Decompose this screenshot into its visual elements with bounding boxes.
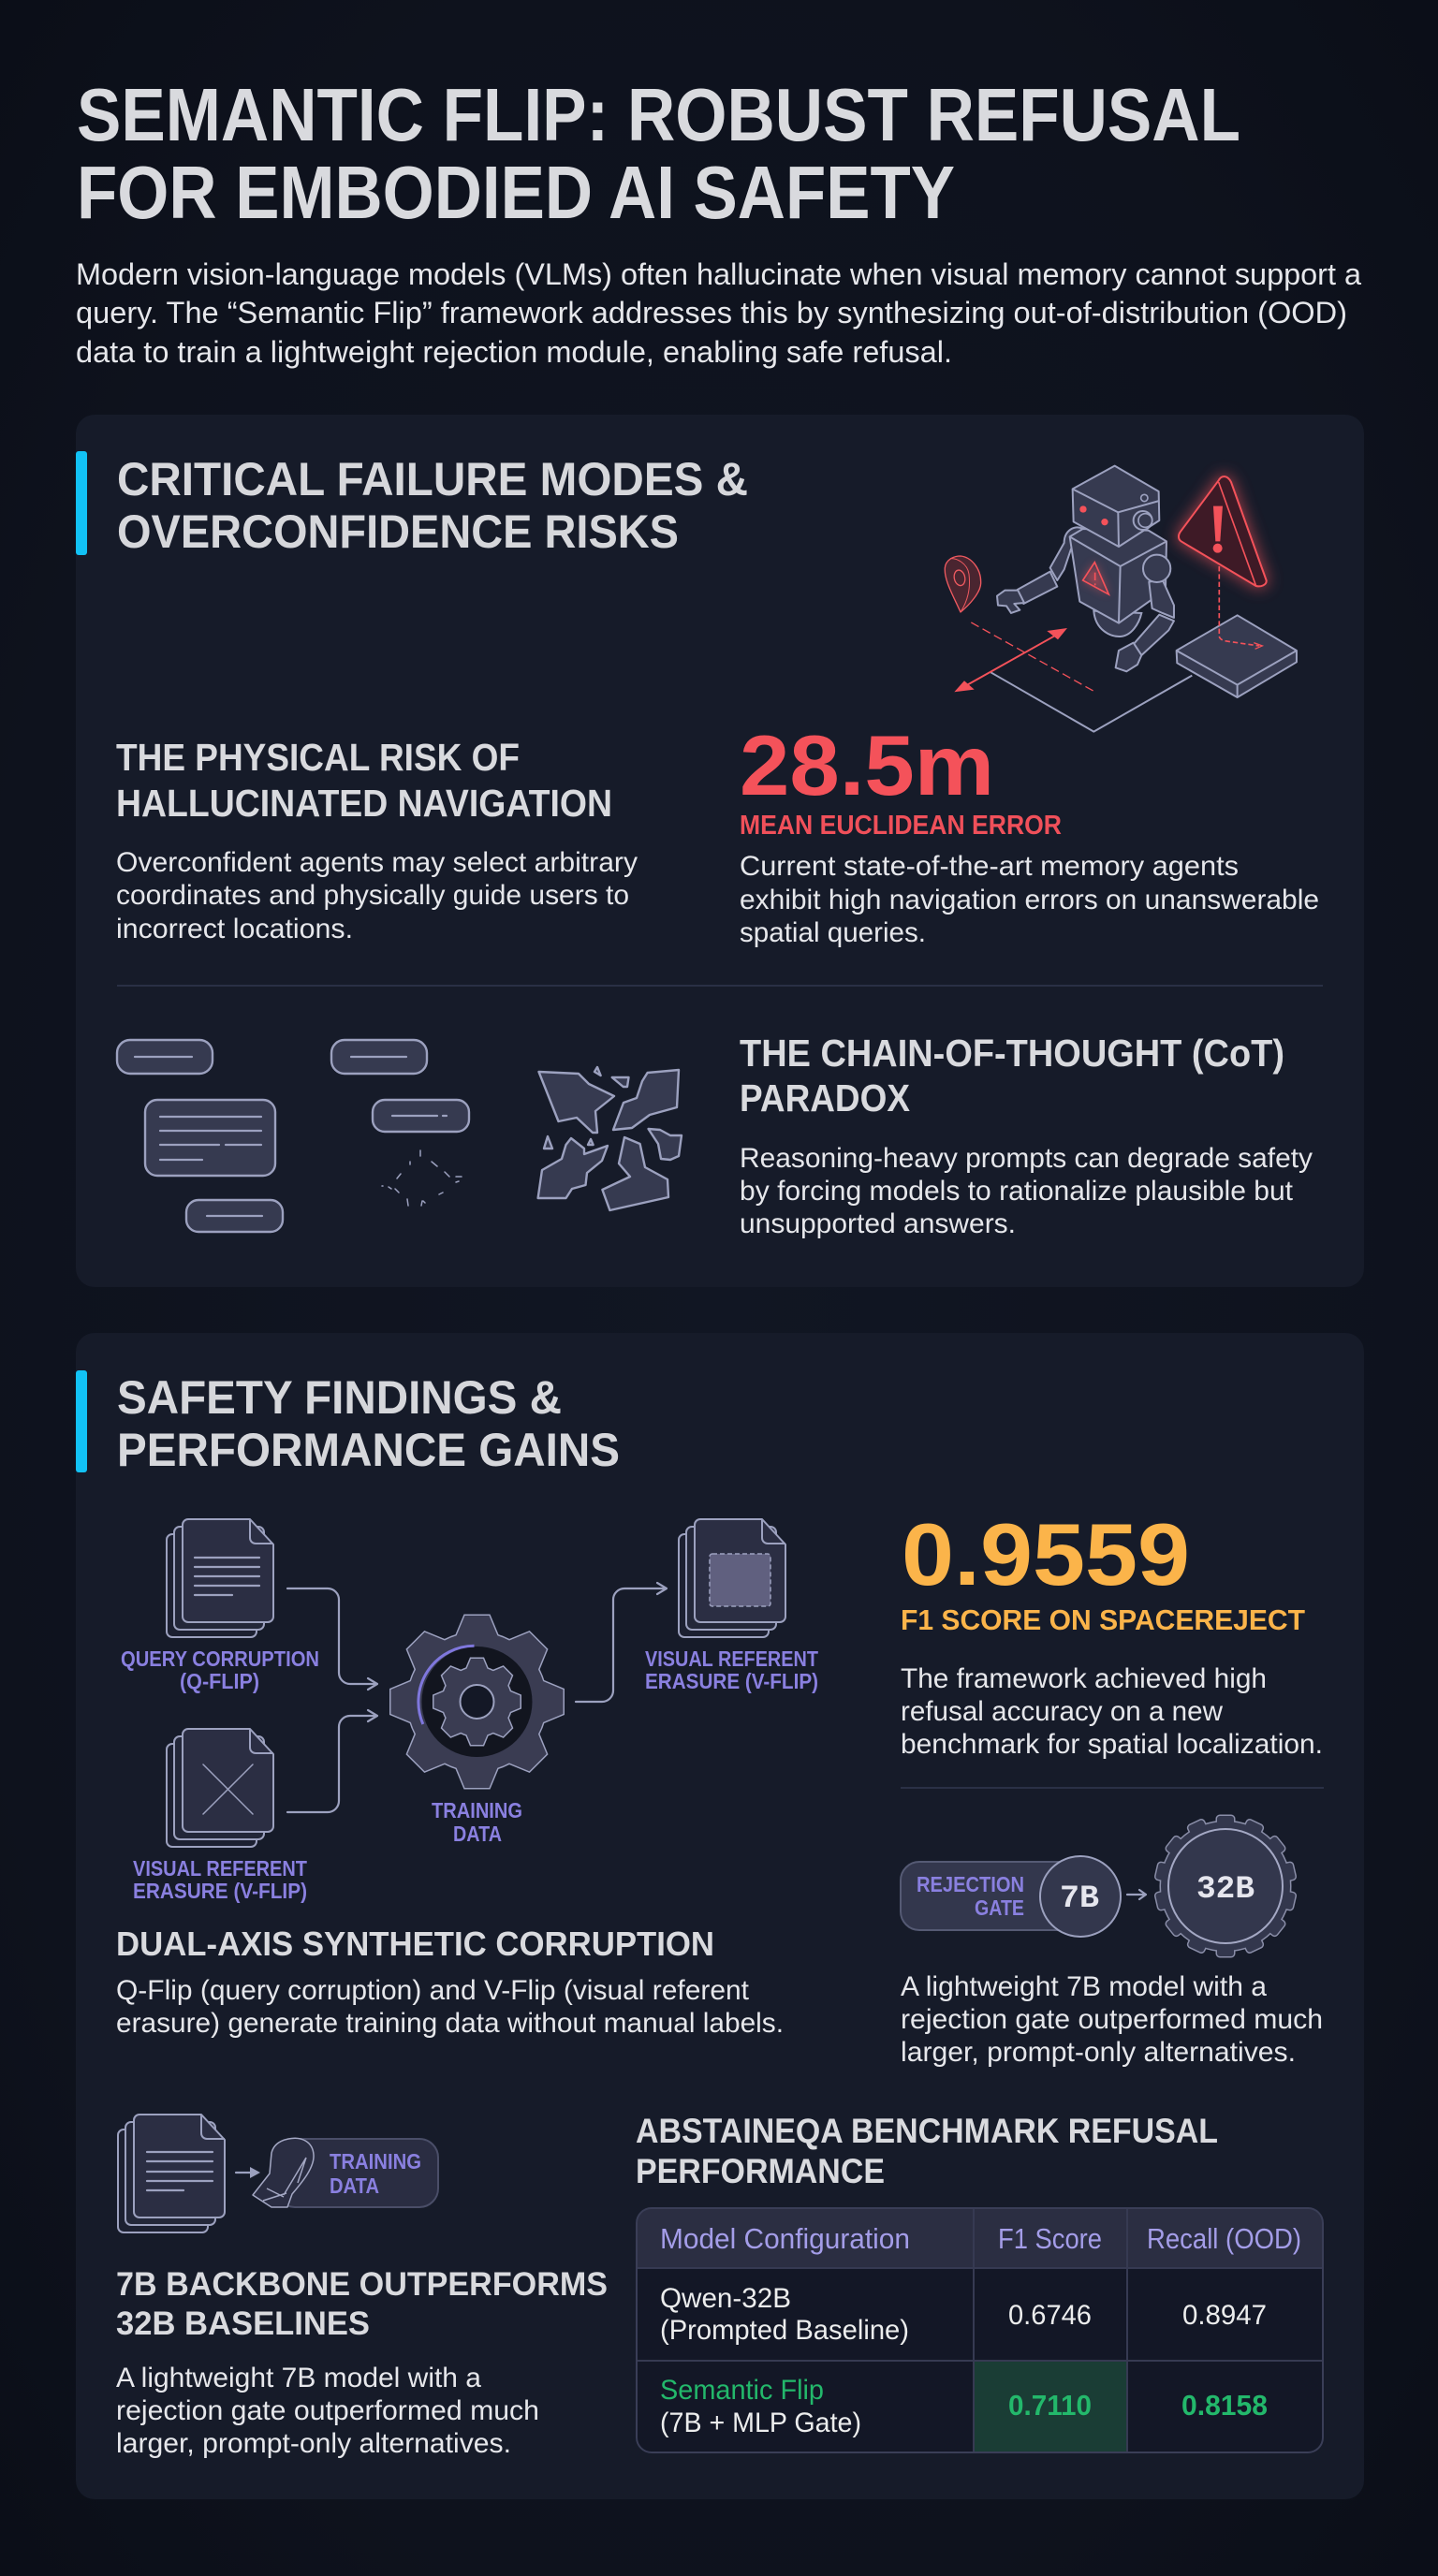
block: lightweight 7B text	[901, 1971, 1323, 2068]
label: visual referent erasure lower: ERASURE (V-FLIP)	[133, 1879, 307, 1903]
stat: 28.5m mean euclidean error: MEAN EUCLIDEAN ERROR	[740, 811, 1062, 841]
stat: 28.5m mean euclidean error: Current state-of-the-art memory agents	[740, 851, 1239, 882]
arrow: erased document to gear	[287, 1710, 377, 1812]
title: FOR EMBODIED AI SAFETY	[77, 151, 955, 234]
table: refusal performance: Semantic Flip	[660, 2375, 824, 2406]
icon: rejection gate 7B versus 32B gear: 7B	[1060, 1881, 1099, 1917]
block: physical risk: THE PHYSICAL RISK OF	[116, 736, 520, 779]
table: refusal performance: Qwen-32B	[660, 2283, 791, 2314]
stat: 0.9559 F1 score: F1 SCORE ON SPACEREJECT	[901, 1603, 1305, 1636]
label: query corruption	[121, 1647, 319, 1693]
block: 7B backbone	[116, 2266, 608, 2459]
table: refusal performance: F1 Score	[998, 2222, 1102, 2255]
intro text block: query. The “Semantic Flip” framework addresses this by synthesizing out-of-distribution (OOD)	[76, 296, 1347, 329]
table heading	[636, 2112, 1218, 2190]
intro text block: Modern vision-language models (VLMs) often hallucinate when visual memory cannot support a	[76, 257, 1361, 291]
section heading: safety findings	[76, 1370, 620, 1476]
block: chain-of-thought paradox: PARADOX	[740, 1076, 910, 1120]
title: SEMANTIC FLIP: ROBUST REFUSAL	[77, 73, 1240, 156]
icon: erased document stack	[167, 1729, 273, 1847]
section heading: critical failure modes: CRITICAL FAILURE MODES &	[117, 453, 748, 505]
stat: 28.5m mean euclidean error: 28.5m	[740, 719, 994, 813]
label: visual referent erasure lower: VISUAL REFERENT	[133, 1856, 307, 1881]
icon: isometric robot with warning	[945, 466, 1297, 732]
block: physical risk: incorrect locations.	[116, 914, 353, 944]
table: refusal performance: 0.7110	[1008, 2389, 1092, 2422]
table: refusal performance: (7B + MLP Gate)	[660, 2408, 861, 2438]
intro text block	[76, 257, 1361, 369]
icon: document to training data pill	[118, 2115, 438, 2232]
intro text block: data to train a lightweight rejection module, enabling safe refusal.	[76, 335, 952, 369]
table: refusal performance: (Prompted Baseline)	[660, 2315, 909, 2346]
section heading: critical failure modes	[76, 451, 748, 558]
label: query corruption: QUERY CORRUPTION	[121, 1647, 319, 1671]
icon: rejection gate 7B versus 32B gear	[901, 1816, 1296, 1956]
block: physical risk	[116, 736, 638, 944]
table: refusal performance	[637, 2208, 1323, 2452]
block: lightweight 7B text: larger, prompt-only alternatives.	[901, 2037, 1296, 2068]
block: dual-axis synthetic corruption: erasure) generate training data without manual labels.	[116, 2008, 784, 2039]
block: physical risk: Overconfident agents may select arbitrary	[116, 847, 638, 878]
table: refusal performance: 0.8947	[1182, 2300, 1267, 2331]
icon: document to training data pill: TRAINING	[330, 2149, 421, 2174]
block: 7B backbone: 32B BASELINES	[116, 2305, 370, 2342]
diagram: dual-axis corruption flow	[121, 1519, 818, 1903]
icon: rejection gate 7B versus 32B gear: GATE	[975, 1895, 1024, 1920]
block: physical risk: HALLUCINATED NAVIGATION	[116, 782, 612, 825]
block: chain-of-thought paradox	[740, 1032, 1313, 1239]
block: chain-of-thought paradox: THE CHAIN-OF-THOUGHT (CoT)	[740, 1032, 1284, 1075]
icon: training data gear	[391, 1616, 564, 1788]
label: query corruption: (Q-FLIP)	[180, 1669, 259, 1693]
block: 7B backbone: 7B BACKBONE OUTPERFORMS	[116, 2266, 608, 2303]
icon: visual referent erased document	[679, 1519, 785, 1637]
stat: 0.9559 F1 score	[901, 1505, 1323, 1760]
block: lightweight 7B text: rejection gate outperformed much	[901, 2004, 1323, 2035]
arrow: gear to output	[576, 1583, 667, 1702]
label: training data: TRAINING	[432, 1798, 522, 1822]
block: chain-of-thought paradox: by forcing models to rationalize plausible but	[740, 1176, 1294, 1207]
block: 7B backbone: rejection gate outperformed much	[116, 2395, 539, 2426]
icon: document to training data pill: DATA	[330, 2174, 379, 2198]
block: chain-of-thought paradox: Reasoning-heavy prompts can degrade safety	[740, 1143, 1313, 1174]
icon: rejection gate 7B versus 32B gear: REJECTION	[917, 1872, 1024, 1896]
block: 7B backbone: A lightweight 7B model with a	[116, 2363, 481, 2393]
label: visual referent erasure upper	[645, 1647, 818, 1693]
label: training data: DATA	[453, 1822, 502, 1846]
arrow: query to gear	[287, 1588, 377, 1690]
section heading: safety findings: PERFORMANCE GAINS	[117, 1424, 620, 1476]
table: refusal performance: 0.6746	[1008, 2300, 1092, 2331]
table heading: PERFORMANCE	[636, 2152, 885, 2190]
table heading: ABSTAINEQA BENCHMARK REFUSAL	[636, 2112, 1218, 2150]
block: dual-axis synthetic corruption: DUAL-AXIS SYNTHETIC CORRUPTION	[116, 1925, 714, 1963]
stat: 0.9559 F1 score: benchmark for spatial localization.	[901, 1729, 1323, 1760]
block: chain-of-thought paradox: unsupported answers.	[740, 1208, 1016, 1239]
panel: safety findings	[76, 1333, 1364, 2499]
stat: 0.9559 F1 score: The framework achieved high	[901, 1663, 1267, 1694]
label: visual referent erasure upper: ERASURE (V-FLIP)	[645, 1669, 818, 1693]
section heading: safety findings: SAFETY FINDINGS &	[117, 1371, 562, 1424]
table: refusal performance: Recall (OOD)	[1147, 2222, 1301, 2255]
block: 7B backbone: larger, prompt-only alternatives.	[116, 2428, 511, 2459]
block: dual-axis synthetic corruption	[116, 1925, 784, 2039]
block: physical risk: coordinates and physically guide users to	[116, 880, 629, 911]
stat: 28.5m mean euclidean error	[740, 719, 1319, 948]
panel: critical failure modes	[76, 415, 1364, 1287]
icon: rejection gate 7B versus 32B gear: 32B	[1196, 1872, 1255, 1908]
stat: 28.5m mean euclidean error: spatial queries.	[740, 917, 926, 948]
stat: 0.9559 F1 score: 0.9559	[902, 1505, 1190, 1603]
icon: chain of thought breaking apart	[117, 1040, 682, 1232]
stat: 28.5m mean euclidean error: exhibit high navigation errors on unanswerable	[740, 885, 1319, 915]
label: visual referent erasure lower	[133, 1856, 307, 1903]
title	[77, 73, 1240, 234]
label: training data	[432, 1798, 522, 1846]
label: visual referent erasure upper: VISUAL REFERENT	[645, 1647, 818, 1671]
icon: query document stack	[167, 1519, 273, 1637]
section heading: critical failure modes: OVERCONFIDENCE RISKS	[117, 505, 679, 558]
table: refusal performance: 0.8158	[1181, 2389, 1268, 2422]
block: lightweight 7B text: A lightweight 7B model with a	[901, 1971, 1267, 2002]
table: refusal performance: Model Configuration	[660, 2222, 910, 2255]
stat: 0.9559 F1 score: refusal accuracy on a new	[901, 1696, 1223, 1727]
block: dual-axis synthetic corruption: Q-Flip (query corruption) and V-Flip (visual referent	[116, 1975, 750, 2006]
